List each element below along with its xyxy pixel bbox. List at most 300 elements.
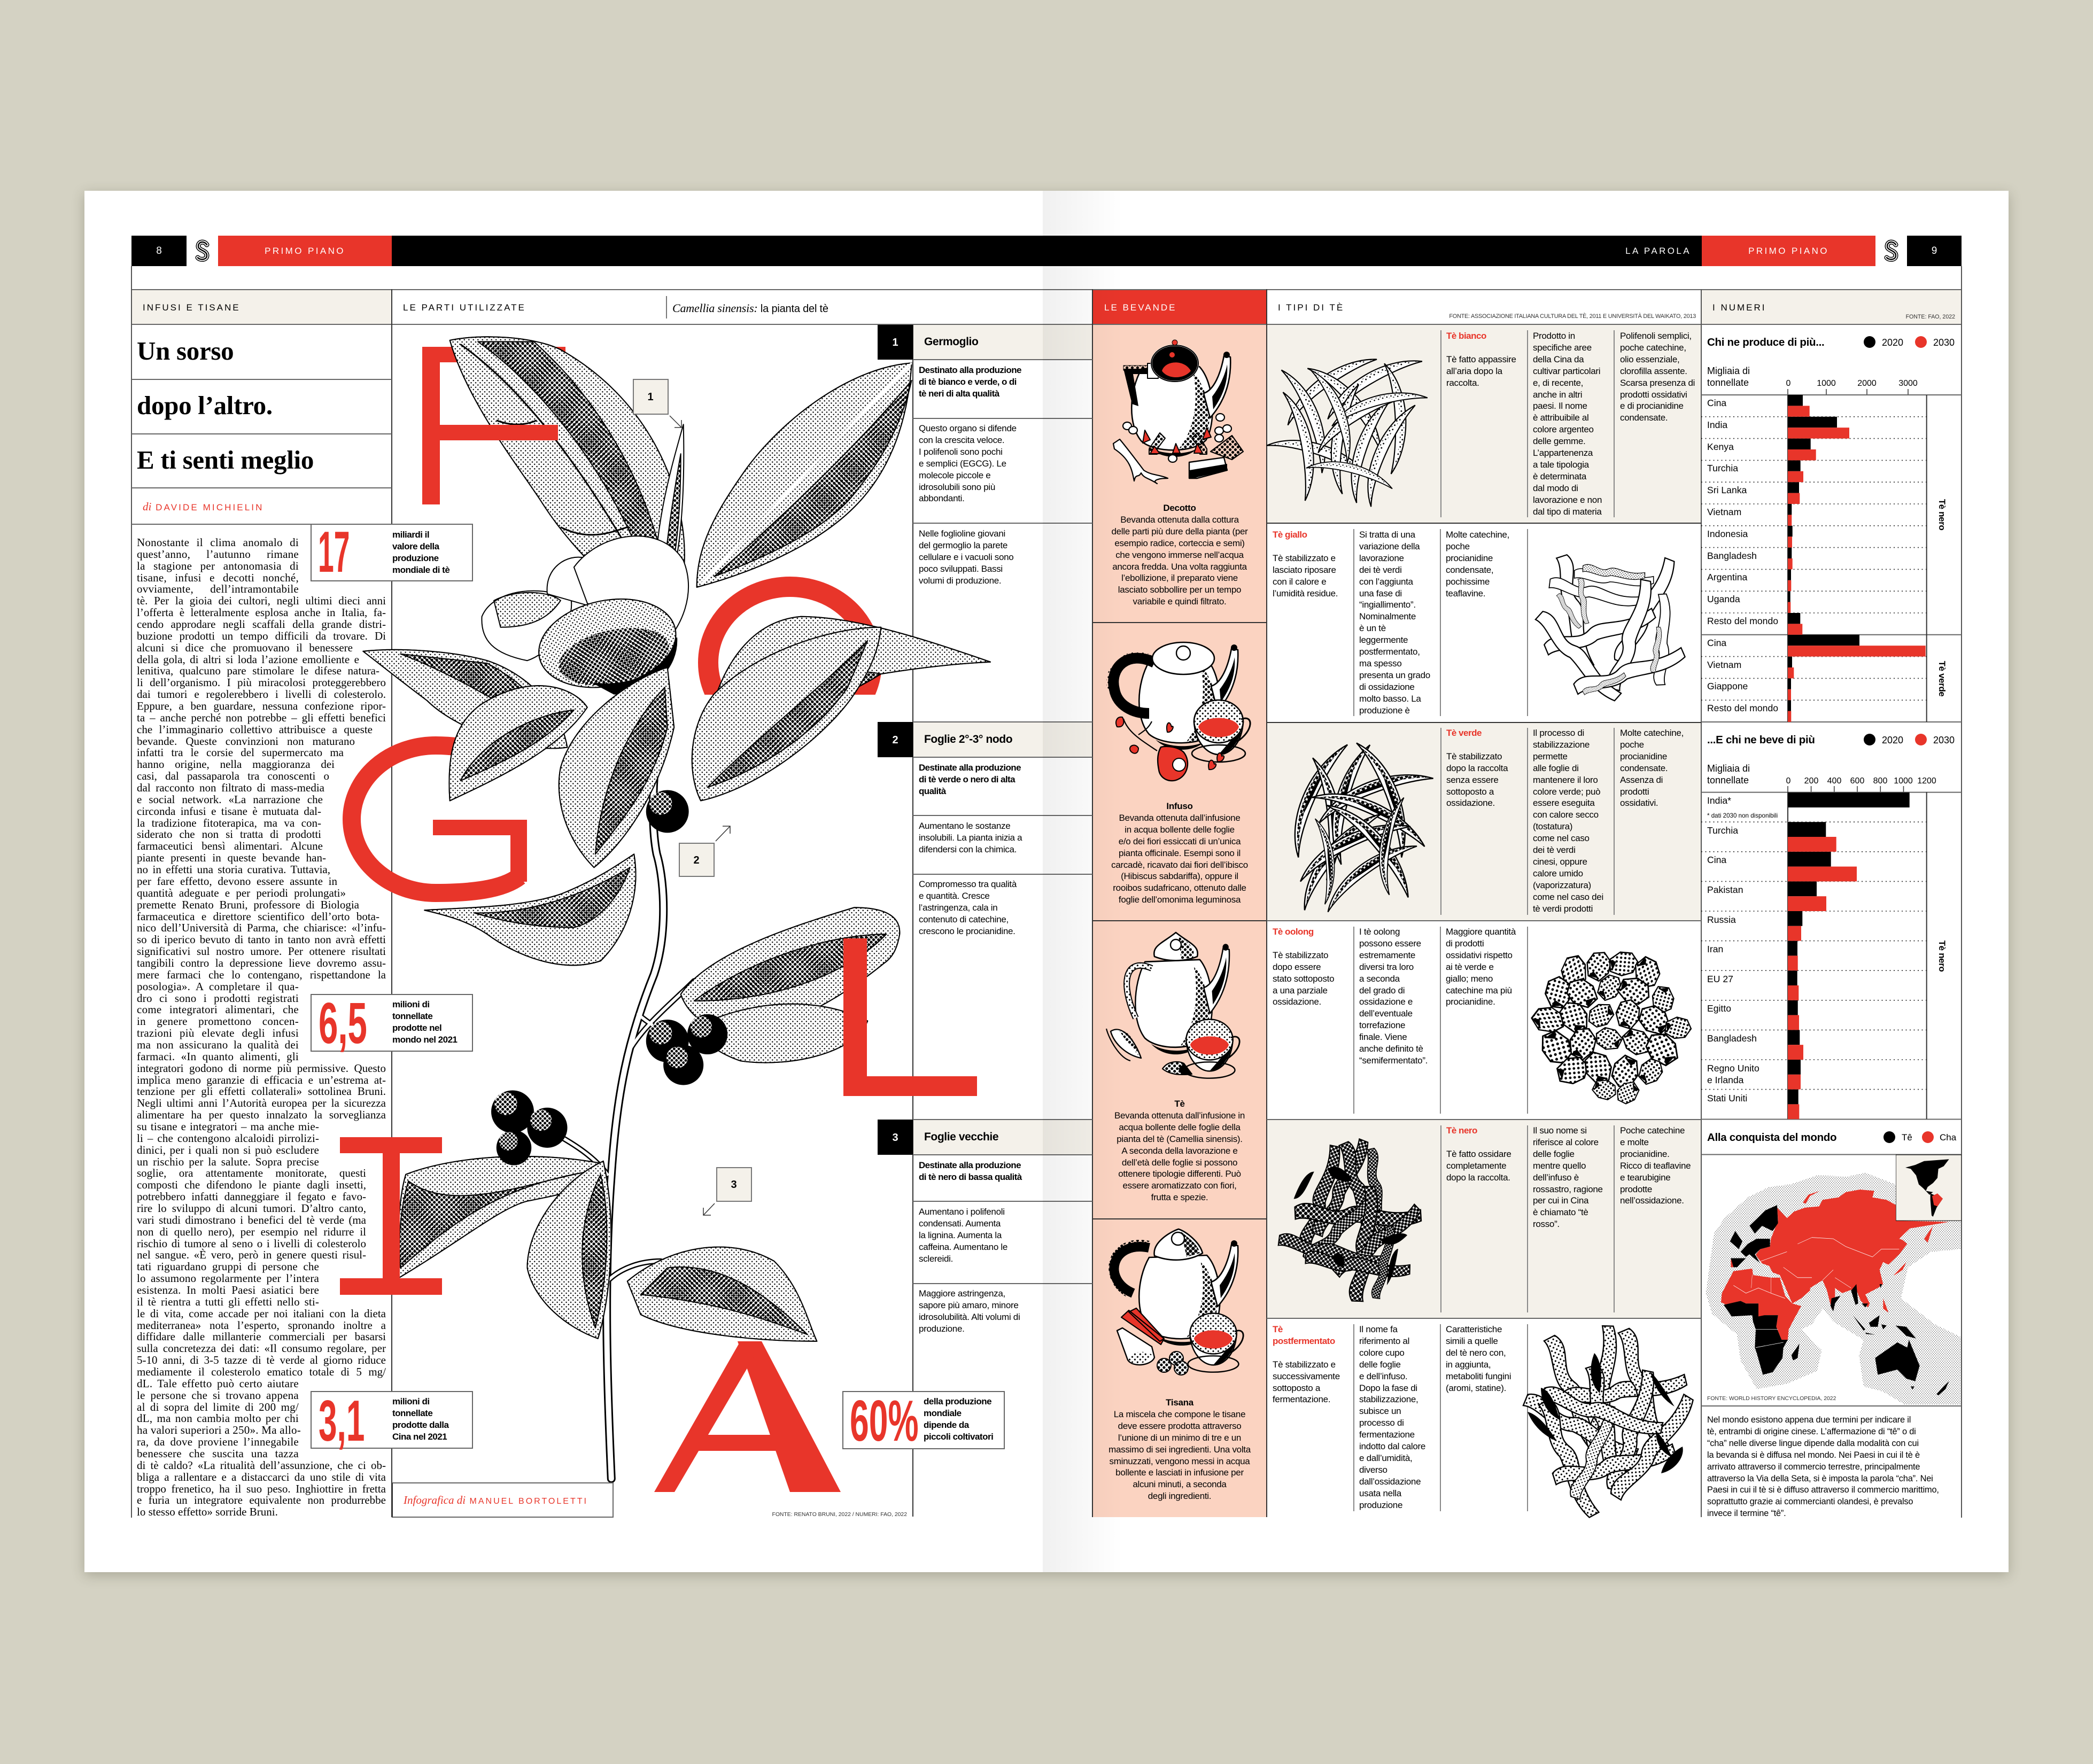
drink: decotto: variabile e quindi filtrato. — [1133, 596, 1226, 607]
tè oolong definition: a una parziale — [1273, 985, 1328, 996]
tè bianco origin: cultivar particolari — [1533, 366, 1600, 376]
panel 2 quality: e quantità. Cresce — [919, 891, 990, 901]
country labels: Regno Unito — [1707, 1063, 1759, 1074]
map explanatory text: arrivato attraverso il commercio terrestre, principalmente — [1707, 1462, 1920, 1472]
tè nero origin: rosso”. — [1533, 1219, 1560, 1229]
panel 2 chemistry: insolubili. La pianta inizia a — [919, 833, 1022, 843]
chart: e chi ne beve di più — [1701, 734, 1962, 1119]
number tab 3 — [878, 1120, 913, 1155]
right red section tab: PRIMO PIANO — [1748, 246, 1829, 256]
leaf: lower right curl — [681, 907, 900, 1034]
tè verde origin: con calore secco — [1533, 810, 1599, 820]
tè oolong definition: ossidazione. — [1273, 997, 1321, 1007]
country labels: Cina — [1707, 854, 1726, 865]
callout text: milioni di — [392, 999, 430, 1009]
article body text: tenzione per gli effetti collaterali» sottolinea Bruni. — [137, 1085, 386, 1098]
tè bianco definition: all’aria dopo la — [1446, 366, 1502, 376]
tè bianco definition: raccolta. — [1446, 378, 1479, 388]
tè bianco chemistry — [1620, 330, 1695, 424]
tè bianco chemistry: e di procianidine — [1620, 401, 1684, 411]
country labels: Vietnam — [1707, 507, 1741, 517]
drink: decotto: Bevanda ottenuta dalla cottura — [1120, 515, 1239, 525]
tè postfermentato definition: sottoposto a — [1273, 1383, 1320, 1393]
callout text — [392, 530, 450, 575]
big red letters behind the plant — [352, 347, 872, 1492]
drink: infuso: Bevanda ottenuta dall’infusione — [1119, 813, 1240, 823]
tè postfermentato origin: delle foglie — [1359, 1359, 1401, 1370]
tè bianco chemistry: olio essenziale, — [1620, 354, 1679, 364]
article body text: integratori godono di norme più permissive. Questo — [137, 1062, 386, 1075]
type: tè verde — [1441, 727, 1701, 914]
drink: tisana: La miscela che compone le tisane — [1114, 1409, 1245, 1419]
country labels: Bangladesh — [1707, 1033, 1757, 1044]
article body text: ha valori superiori a 250». Ma allo- — [137, 1424, 301, 1436]
tè postfermentato origin: diverso — [1359, 1465, 1387, 1475]
article body text: e social network. «La narrazione che — [137, 793, 323, 806]
article body text: li dell’organismo. I più miracolosi proteggerebbero — [137, 676, 386, 689]
country labels: Vietnam — [1707, 659, 1741, 670]
map explanatory text: soprattutto grazie ai commercianti olandesi, è prevalso — [1707, 1497, 1913, 1506]
country labels: India — [1707, 419, 1727, 430]
article body text: non di quello nero), per esempio nel ridurre il — [137, 1225, 366, 1238]
callout text — [392, 999, 458, 1045]
country labels: Cina — [1707, 638, 1726, 648]
byline: di DAVIDE MICHIELIN — [143, 500, 263, 513]
drink: tè: frutta e spezie. — [1151, 1192, 1208, 1202]
plant marker 2: 2 — [693, 854, 700, 866]
tè oolong chemistry: di prodotti — [1446, 938, 1484, 949]
panel 1: germoglio — [919, 336, 1021, 586]
panel 1 growth: poco sviluppati. Bassi — [919, 564, 1003, 574]
panel 3 bold note — [919, 1160, 1022, 1183]
article body text: la tradizione fitoterapica, ma va con- — [137, 817, 321, 829]
drink: tè: Tè — [1174, 1099, 1185, 1109]
tè postfermentato chemistry — [1446, 1324, 1511, 1394]
illustration: tè oolong fragments — [1529, 946, 1694, 1106]
tè verde definition: senza essere — [1446, 775, 1499, 785]
country labels: India* — [1707, 795, 1731, 806]
panel 3 chemistry: condensati. Aumenta — [919, 1218, 1001, 1229]
bars 2020 — [1788, 395, 1859, 711]
type: tè oolong — [1267, 926, 1529, 1113]
north africa cha area — [1721, 1269, 1801, 1340]
tè giallo origin: lavorazione — [1359, 553, 1404, 563]
drink: decotto: che vengono immerse nell’acqua — [1115, 550, 1244, 560]
panel 3 chemistry: sclereidi. — [919, 1254, 953, 1264]
tè bianco origin: delle gemme. — [1533, 436, 1585, 446]
article body text: ovviamente, dell’intramontabile — [137, 582, 299, 595]
tè postfermentato definition: Tè — [1273, 1324, 1283, 1334]
article body text: le di vita, come accade per noi italiani con la dieta — [137, 1307, 386, 1320]
tè postfermentato origin: produzione — [1359, 1500, 1402, 1510]
article body text: soglie, ora attentamente monitorate, questi — [137, 1167, 366, 1179]
big number 6,5: 6,5 — [319, 991, 367, 1056]
country labels: Argentina — [1707, 572, 1748, 582]
panel 1 growth: volumi di produzione. — [919, 576, 1001, 586]
article body text: piante presenti in queste bevande han- — [137, 851, 326, 864]
big number 60%: 60% — [850, 1388, 919, 1454]
tè giallo origin: molto basso. La — [1359, 694, 1421, 704]
article body text: potrebbero infatti danneggiare il fegato e favo- — [137, 1190, 366, 1203]
article body text: per fare effetto, devono essere assunte in — [137, 875, 337, 888]
tè postfermentato definition: fermentazione. — [1273, 1394, 1330, 1404]
map explanatory text: Nel mondo esistono appena due termini per indicare il — [1707, 1415, 1911, 1425]
panel 3 taste: Maggiore astringenza, — [919, 1288, 1005, 1299]
tè countries — [1724, 1205, 1949, 1395]
panel 1 chemistry: con la crescita veloce. — [919, 435, 1004, 445]
plant marker 2 — [679, 826, 730, 876]
axis: 800 — [1873, 776, 1887, 786]
number tab 1: 1 — [892, 337, 898, 348]
icon: decotto pot and roots — [1113, 340, 1243, 484]
panel 2 quality: Compromesso tra qualità — [919, 879, 1017, 889]
panel 2 quality — [919, 879, 1017, 937]
article body text: un rischio per la salute. Sopra precise — [137, 1155, 319, 1168]
country labels: Turchia — [1707, 463, 1738, 473]
drink: decotto — [1092, 502, 1267, 608]
section label: infusi e tisane: INFUSI E TISANE — [143, 302, 241, 313]
callout text — [924, 1396, 993, 1442]
panel 1 chemistry: abbondanti. — [919, 493, 965, 503]
panel 1 growth — [919, 529, 1013, 586]
tè bianco chemistry: condensate. — [1620, 413, 1668, 423]
article body text: mere farmaci che lo contengano, rispettandone la — [137, 968, 386, 981]
country labels — [1707, 398, 1778, 713]
article body text: ma non assicurano la qualità dei — [137, 1038, 299, 1051]
illustration: camellia sinensis plant — [363, 337, 990, 1479]
tè oolong chemistry — [1446, 926, 1516, 1008]
panel 2 title: Foglie 2°-3° nodo — [924, 733, 1012, 745]
tè giallo chemistry: procianidine — [1446, 553, 1493, 563]
icon: infuso pot, cup and hibiscus — [1108, 642, 1250, 781]
tè oolong origin: del grado di — [1359, 985, 1405, 996]
article body text: Negli ultimi anni l’Autorità europea per la sicurezza — [137, 1097, 386, 1109]
axis: tonnellate — [1707, 377, 1749, 388]
axis — [1707, 366, 1918, 395]
tè oolong chemistry: procianidine. — [1446, 997, 1495, 1007]
article body text: l’offerta è letteralmente esplosa anche in Italia, fa- — [137, 606, 386, 619]
country labels: Sri Lanka — [1707, 485, 1747, 495]
leaf: lower right — [694, 1004, 867, 1063]
article body text: premette Renato Bruni, professore di Biologia — [137, 898, 359, 911]
tè verde chemistry: Assenza di — [1620, 775, 1663, 785]
drink: tisana: deve essere prodotta attraverso — [1118, 1421, 1241, 1431]
headline line 3: E ti senti meglio — [137, 445, 314, 475]
axis: 1000 — [1817, 379, 1836, 388]
panel 1 chemistry — [919, 423, 1017, 503]
panel 3 bold note: Destinate alla produzione — [919, 1160, 1021, 1170]
article body text: dai tumori e regolerebbero i livelli di colesterolo. — [137, 688, 386, 701]
map heading and legend — [1707, 1131, 1957, 1144]
drink: infuso: Infuso — [1166, 801, 1193, 811]
article body text: della gola, di altri si loda l’azione emolliente e — [137, 653, 359, 666]
tè nero definition: Tè nero — [1446, 1125, 1477, 1136]
article body text: dL. Tale effetto può certo aiutare — [137, 1377, 299, 1390]
article body text: tangibili contro la depressione lieve dovremo assu- — [137, 957, 386, 969]
article body text: bliga a rallentare e a distaccarci da uno stile di vita — [137, 1471, 386, 1483]
drink: infuso: pianta officinale. Esempi sono il — [1119, 848, 1241, 858]
article body text: alimentare ha per questo innalzato la sorveglianza — [137, 1108, 386, 1121]
country labels: Uganda — [1707, 594, 1740, 604]
article body text: la stagione per antonomasia di — [137, 559, 299, 572]
axis: 3000 — [1898, 379, 1918, 388]
callout text: tonnellate — [392, 1408, 432, 1418]
tè nero chemistry: Ricco di teaflavine — [1620, 1161, 1691, 1171]
leaf: centre — [559, 667, 674, 867]
country labels: Egitto — [1707, 1003, 1731, 1014]
callout text: valore della — [392, 541, 439, 551]
illustration: tè nero leaves — [1277, 1138, 1426, 1303]
source note: plant: FONTE: RENATO BRUNI, 2022 / NUMERI: FAO, 2022 — [772, 1512, 907, 1518]
tè giallo chemistry: Molte catechine, — [1446, 530, 1509, 540]
tè nero chemistry: Poche catechine — [1620, 1125, 1685, 1136]
map explanatory text — [1707, 1415, 1939, 1520]
cream row tè verde — [1267, 722, 1701, 921]
drink: infuso — [1092, 801, 1267, 906]
drink: decotto: Decotto — [1163, 503, 1196, 513]
panel 3 bold note: di tè nero di bassa qualità — [919, 1172, 1022, 1182]
leaf: lower left — [424, 854, 635, 965]
axis: 2000 — [1857, 379, 1877, 388]
tè bianco chemistry: Scarsa presenza di — [1620, 378, 1695, 388]
callout text: mondiale di tè — [392, 565, 449, 575]
tè verde origin: come nel caso dei — [1533, 892, 1603, 902]
article body text: lo stesso effetto» sorride Bruni. — [137, 1505, 278, 1518]
tè bianco origin: L’appartenenza — [1533, 448, 1593, 458]
country labels: Pakistan — [1707, 884, 1743, 895]
callout: 6,5 milioni — [311, 994, 473, 1052]
article body text: lenitiva, qualcuno pare stimolare le difese natura- — [137, 664, 379, 677]
article body text: mediterranea» nota l’esperto, spronando inoltre a — [137, 1319, 386, 1332]
leaf: top right — [697, 363, 912, 587]
panel 1 chemistry: molecole piccole e — [919, 470, 990, 480]
numbers cream header — [1701, 289, 1962, 324]
panel 1 chemistry: Questo organo si difende — [919, 423, 1017, 433]
tè oolong origin: dell’eventuale — [1359, 1008, 1413, 1019]
drink: tisana: bollente e lasciati in infusione per — [1115, 1467, 1244, 1478]
tè bianco origin: è attribuibile al — [1533, 413, 1589, 423]
stems — [534, 721, 694, 1479]
cream header foglie vecchie — [913, 1120, 1092, 1155]
article body text: circonda infusi e tisane è mutuata dal- — [137, 805, 321, 818]
tè bianco origin: a tale tipologia — [1533, 460, 1589, 470]
type: tè postfermentato — [1267, 1324, 1529, 1511]
red drinks header — [1092, 289, 1267, 324]
tè giallo origin: una fase di — [1359, 588, 1402, 599]
callout text: prodotte dalla — [392, 1420, 448, 1430]
country labels: * dati 2030 non disponibili — [1707, 812, 1778, 819]
map heading and legend: Alla conquista del mondo — [1707, 1131, 1836, 1144]
tè verde origin: mantenere il loro — [1533, 775, 1598, 785]
tè bianco definition: Tè bianco — [1446, 331, 1486, 341]
callout text: mondo nel 2021 — [392, 1035, 457, 1045]
tè nero definition: completamente — [1446, 1161, 1506, 1171]
map explanatory text: la bevanda si è diffusa nel mondo. Nei Paesi in cui il tè è — [1707, 1450, 1920, 1460]
tè oolong definition: stato sottoposto — [1273, 974, 1334, 984]
panel 2 chemistry — [919, 820, 1022, 856]
tè bianco origin — [1533, 330, 1602, 517]
tè postfermentato origin: e dall’umidità, — [1359, 1453, 1412, 1463]
tè giallo chemistry: poche — [1446, 541, 1470, 551]
tè verde origin: cinesi, oppure — [1533, 857, 1587, 867]
tè bianco chemistry: Polifenoli semplici, — [1620, 331, 1692, 341]
map heading and legend: Tê — [1902, 1132, 1912, 1143]
tè nero origin: dell’infuso è — [1533, 1172, 1579, 1183]
panel 3 chemistry — [919, 1206, 1007, 1265]
drink: infuso: (Hibiscus sabdariffa), oppure il — [1121, 871, 1238, 881]
tè oolong origin: anche definito tè — [1359, 1044, 1423, 1054]
country labels: Resto del mondo — [1707, 616, 1778, 626]
callout text: miliardi il — [392, 530, 429, 540]
tè bianco chemistry: clorofilla assente. — [1620, 366, 1687, 376]
panel 1 chemistry: idrosolubili sono più — [919, 482, 995, 492]
tè giallo definition: Tè giallo — [1273, 530, 1307, 540]
tè verde definition: sottoposto a — [1446, 787, 1494, 797]
tè giallo origin: leggermente — [1359, 635, 1408, 645]
drink: tisana: l’unione di un minimo di tre e un — [1118, 1433, 1241, 1443]
axis: 0 — [1786, 776, 1791, 786]
tè verde definition: ossidazione. — [1446, 798, 1495, 808]
axis: 1200 — [1917, 776, 1936, 786]
tè giallo origin: Nominalmente — [1359, 611, 1416, 621]
article body text: vari studi dimostrano i benefici del tè verde (ma — [137, 1214, 366, 1226]
tè giallo origin: postfermentato, — [1359, 647, 1420, 657]
country labels: Russia — [1707, 914, 1736, 925]
drink: infuso: rooibos sudafricano, ottenuto dalle — [1113, 883, 1246, 893]
drink: tisana — [1092, 1397, 1267, 1502]
world map: tè and cha — [1706, 1155, 1962, 1404]
headline — [137, 336, 314, 513]
headline line 1: Un sorso — [137, 336, 234, 366]
panel 3 title: Foglie vecchie — [924, 1131, 998, 1143]
callout text: piccoli coltivatori — [924, 1432, 993, 1442]
article body text: farmaceutici bensì alimentari. Alcune — [137, 840, 323, 852]
chart title and legend: ...E chi ne beve di più — [1707, 734, 1815, 746]
map explanatory text: tè, entrambi di origine cinese. L’affermazione di “tê” o di — [1707, 1427, 1916, 1436]
map explanatory text: “cha” nelle diverse lingue dipende dalla modalità con cui — [1707, 1439, 1919, 1448]
drink: decotto: l’ebollizione, il preparato viene — [1121, 573, 1238, 583]
tè postfermentato origin — [1359, 1324, 1425, 1511]
tè oolong origin: finale. Viene — [1359, 1032, 1407, 1042]
article body text: al di sopra del limite di 200 mg/ — [137, 1401, 299, 1413]
tè postfermentato origin: Dopo la fase di — [1359, 1383, 1417, 1393]
article body text: casi, dal passaparola tra conoscenti o — [137, 770, 329, 782]
chart title and legend: Chi ne produce di più... — [1707, 336, 1824, 348]
inset: americas — [1896, 1155, 1962, 1221]
article body text: ta – anche perché non potrebbe – gli effetti benefici — [137, 711, 386, 724]
left red section tab: PRIMO PIANO — [265, 246, 345, 256]
tè giallo chemistry: teaflavine. — [1446, 588, 1485, 599]
tè giallo origin: di ossidazione — [1359, 682, 1415, 692]
tè oolong definition: Tè stabilizzato — [1273, 950, 1328, 960]
tè verde chemistry: poche — [1620, 740, 1644, 750]
tè postfermentato chemistry: metaboliti fungini — [1446, 1371, 1511, 1381]
drink: decotto: esempio radice, corteccia e semi) — [1114, 538, 1245, 548]
panel 2 bold note — [919, 763, 1021, 796]
tè nero definition: dopo la raccolta. — [1446, 1172, 1510, 1183]
tè nero chemistry: e molte — [1620, 1137, 1649, 1147]
tè postfermentato definition: Tè stabilizzato e — [1273, 1359, 1336, 1370]
tè verde origin: come nel caso — [1533, 833, 1590, 843]
plant marker 1 — [633, 379, 681, 428]
tè verde origin: permette — [1533, 751, 1568, 761]
article body text: composti che difendono le piante dagli insetti, — [137, 1178, 366, 1191]
panel 3 chemistry: caffeina. Aumentano le — [919, 1242, 1007, 1252]
leaf: left middle — [363, 650, 567, 748]
tè nero chemistry: prodotte — [1620, 1184, 1652, 1194]
panel 3 taste: idrosolubilità. Alti volumi di — [919, 1312, 1020, 1322]
bars 2030 — [1788, 406, 1926, 722]
drink: infuso: foglie dell’omonima leguminosa — [1119, 895, 1241, 905]
article body text: tè. Per la gioia dei cultori, negli ultimi dieci anni — [137, 594, 386, 607]
axis: Migliaia di — [1707, 366, 1750, 376]
tè postfermentato origin: fermentazione — [1359, 1429, 1415, 1440]
tè giallo origin: Si tratta di una — [1359, 530, 1415, 540]
tè bianco origin: anche in altri — [1533, 390, 1582, 400]
callout text: dipende da — [924, 1420, 969, 1430]
article body text: tisane, infusi e decotti nonché, — [137, 571, 299, 584]
tè giallo definition: con il calore e — [1273, 577, 1326, 587]
drink: tè: Bevanda ottenuta dall’infusione in — [1114, 1110, 1245, 1121]
cream header foglie nodo — [913, 722, 1092, 757]
tè nero chemistry — [1620, 1125, 1691, 1207]
tè giallo origin: con l’aggiunta — [1359, 577, 1413, 587]
tè giallo definition — [1273, 529, 1338, 599]
drink: tisana: sminuzzati, vengono messi in acqua — [1110, 1456, 1250, 1466]
article body text: sulla concretezza dei dati: «Il consumo regolare, per — [137, 1342, 386, 1355]
header bar — [131, 236, 1962, 266]
axis — [1707, 763, 1936, 792]
right red section tab — [1702, 236, 1875, 266]
tè verde origin: colore verde; può — [1533, 787, 1600, 797]
article body text: cendo approdare negli scaffali della grande distri- — [137, 618, 386, 631]
tè oolong definition: dopo essere — [1273, 962, 1321, 972]
tè verde chemistry: ossidativi. — [1620, 798, 1658, 808]
illustration: tè postfermentato leaves — [1521, 1324, 1701, 1521]
tè bianco origin: colore argenteo — [1533, 424, 1594, 434]
drink: tè: pianta del tè (Camellia sinensis). — [1117, 1134, 1243, 1144]
printed spread page — [84, 191, 2009, 1572]
tè oolong chemistry: ai tè verde e — [1446, 962, 1494, 972]
article body text: posologia». A completare il qua- — [137, 980, 299, 993]
tè verde origin: calore umido — [1533, 868, 1583, 879]
article body text: Eppure, a ben guardare, nessuna confezione ripor- — [137, 700, 386, 712]
tè nero origin: riferisce al colore — [1533, 1137, 1599, 1147]
cream header germoglio — [913, 325, 1092, 360]
article body text: che l’immaginario collettivo attribuisce a queste — [137, 723, 373, 736]
tè verde origin: Il processo di — [1533, 728, 1584, 738]
number tab 2: 2 — [892, 734, 898, 746]
tè oolong chemistry: ossidativi rispetto — [1446, 950, 1513, 960]
tè nero origin: mentre quello — [1533, 1161, 1586, 1171]
tè postfermentato chemistry: (aromi, statine). — [1446, 1383, 1506, 1393]
tè bianco origin: è determinata — [1533, 471, 1586, 481]
article body text: so di iperico bevuto di tanto in tanto non avrà effetti — [137, 933, 386, 946]
article body text: trazioni più elevate degli infusi — [137, 1027, 299, 1039]
drink: tisana: alcuni minuti, a seconda — [1133, 1479, 1227, 1489]
tè postfermentato definition: postfermentato — [1273, 1336, 1335, 1346]
section label: le bevande: LE BEVANDE — [1104, 302, 1177, 313]
letter L over plant — [843, 938, 977, 1096]
tè bianco chemistry: prodotti ossidativi — [1620, 390, 1687, 400]
tè verde definition: dopo la raccolta — [1446, 763, 1508, 773]
icon: tè pot, cup and leaves — [1106, 932, 1239, 1078]
callout text: della produzione — [924, 1396, 991, 1406]
chart title and legend: 2020 — [1882, 735, 1903, 745]
article body text: ra, da dove proviene l’innegabile — [137, 1435, 299, 1448]
axis: 0 — [1786, 379, 1791, 388]
drink: tisana: degli ingredienti. — [1148, 1491, 1211, 1501]
